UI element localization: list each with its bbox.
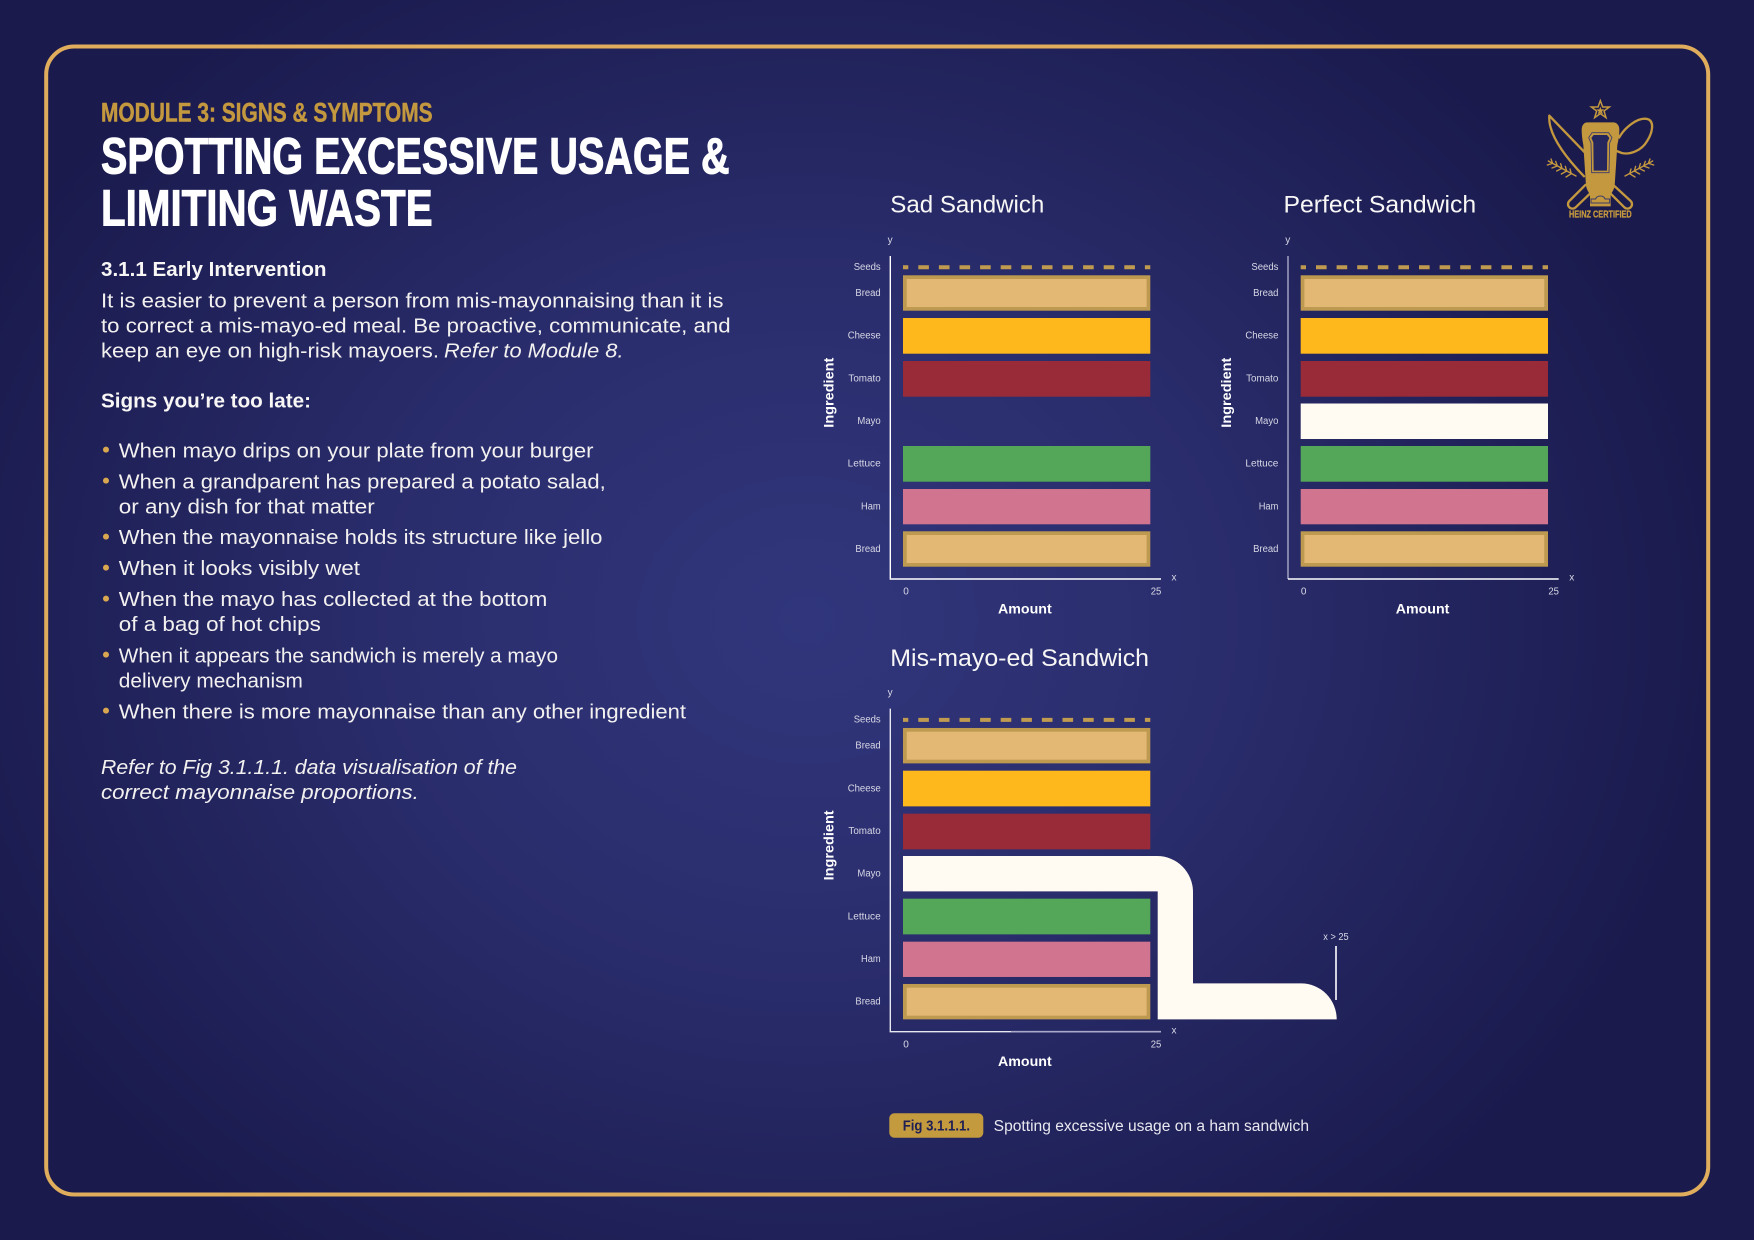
bullet list of signs: of a bag of hot chips <box>119 614 321 636</box>
axis annotations: 0 <box>1301 587 1307 598</box>
ingredient labels: Cheese <box>848 331 881 342</box>
axis annotations <box>1285 235 1574 598</box>
bullet list of signs: When the mayonnaise holds its structure like jello <box>119 527 602 549</box>
callout: x > 25 marker <box>1323 932 1349 1000</box>
axis annotations: x <box>1569 573 1574 584</box>
bullet list of signs: delivery mechanism <box>119 670 303 692</box>
intro paragraph: to correct a mis-mayo-ed meal. Be proactive, communicate, and <box>101 315 731 337</box>
chart: Sad Sandwich <box>820 192 1176 616</box>
bar: cheese <box>1301 318 1548 354</box>
bar: lettuce <box>903 446 1150 482</box>
bar: top bread <box>905 730 1148 762</box>
ingredient labels: Cheese <box>1245 331 1279 342</box>
bar: bottom bread <box>1303 533 1546 565</box>
ingredient labels: Cheese <box>848 783 881 794</box>
main title: LIMITING WASTE <box>101 180 433 237</box>
ingredient labels: Lettuce <box>848 459 881 470</box>
bullet list of signs: When a grandparent has prepared a potato salad, <box>119 471 606 493</box>
figure reference note <box>101 757 517 804</box>
bullet list of signs: When mayo drips on your plate from your burger <box>119 440 594 462</box>
intro paragraph <box>101 290 731 362</box>
bar: tomato <box>1301 361 1548 397</box>
ingredient labels: Mayo <box>1255 416 1279 427</box>
axis annotations: y <box>888 235 893 246</box>
ingredient labels: Tomato <box>848 373 881 384</box>
main title <box>101 127 730 237</box>
ingredient labels: Seeds <box>854 262 881 273</box>
section heading: early intervention: 3.1.1 Early Intervention <box>101 259 326 281</box>
axes <box>1288 256 1559 579</box>
bullet list of signs <box>103 440 686 723</box>
chart title: Mis-mayo-ed Sandwich <box>890 645 1149 672</box>
ingredient labels: Lettuce <box>1245 459 1279 470</box>
bullet list of signs: When the mayo has collected at the bottom <box>119 589 547 611</box>
ingredient labels: Seeds <box>854 715 881 726</box>
ingredient labels: Tomato <box>848 826 881 837</box>
axis title: Amount: Amount <box>998 600 1052 616</box>
caption badge <box>889 1113 983 1138</box>
bar: seeds <box>1301 265 1548 269</box>
bar: lettuce <box>1301 446 1548 482</box>
ingredient labels: Bread <box>855 544 881 555</box>
figure caption <box>889 1113 1309 1138</box>
ingredient labels: Bread <box>1253 288 1278 299</box>
axis annotations: x <box>1172 1025 1176 1036</box>
bar: bottom bread <box>905 986 1148 1018</box>
chart title: Perfect Sandwich <box>1284 192 1476 219</box>
axis annotations: 0 <box>903 587 909 598</box>
bar: top bread <box>905 277 1148 309</box>
ingredient labels: Bread <box>855 288 881 299</box>
bar: top bread <box>1303 277 1546 309</box>
ingredient labels: Bread <box>855 997 881 1008</box>
caption text: Spotting excessive usage on a ham sandwich <box>994 1118 1309 1135</box>
bar: cheese <box>903 318 1150 354</box>
axis annotations: 25 <box>1548 587 1559 598</box>
bullet list of signs: When it looks visibly wet <box>119 558 360 580</box>
main title: SPOTTING EXCESSIVE USAGE & <box>101 127 730 184</box>
ingredient labels <box>1245 262 1279 555</box>
ingredient labels: Tomato <box>1246 373 1279 384</box>
intro paragraph: It is easier to prevent a person from mis-mayonnaising than it is <box>101 290 724 312</box>
ingredient labels <box>848 262 881 555</box>
axis title: Ingredient: Ingredient <box>1218 357 1234 428</box>
ingredient labels <box>848 715 881 1008</box>
bar: lettuce <box>903 899 1150 934</box>
axis annotations: 25 <box>1151 587 1162 598</box>
subheading: signs you're too late: Signs you’re too late: <box>101 390 311 412</box>
bar: overflowing mayo <box>903 856 1337 1019</box>
bar: tomato <box>903 814 1150 849</box>
bar: tomato <box>903 361 1150 397</box>
axes <box>890 709 1161 1032</box>
chart title: Sad Sandwich <box>890 192 1044 219</box>
bar: mayo <box>1301 404 1548 439</box>
ingredient labels: Bread <box>1253 544 1278 555</box>
chart: Perfect Sandwich <box>1218 192 1574 616</box>
axis annotations: x <box>1172 573 1176 584</box>
ingredient labels: Ham <box>1259 501 1278 512</box>
axis annotations <box>888 688 1176 1050</box>
intro paragraph: keep an eye on high-risk mayoers. <box>101 340 439 362</box>
ingredient labels: Ham <box>861 501 881 512</box>
chart: Mis-mayo-ed Sandwich <box>820 645 1349 1069</box>
axis title: Ingredient: Ingredient <box>820 810 836 880</box>
axis title: Amount: Amount <box>1396 600 1450 616</box>
ingredient labels: Lettuce <box>848 911 881 922</box>
ingredient labels: Seeds <box>1251 262 1278 273</box>
bullet list of signs: When there is more mayonnaise than any other ingredient <box>119 701 686 723</box>
ingredient labels: Mayo <box>857 416 881 427</box>
axis annotations: y <box>1285 235 1290 246</box>
ingredient labels: Mayo <box>857 869 881 880</box>
bar: seeds <box>903 265 1150 269</box>
axis annotations <box>888 235 1176 598</box>
axis title: Ingredient: Ingredient <box>820 357 836 428</box>
axis annotations: y <box>888 688 893 699</box>
bar: ham <box>903 942 1150 977</box>
bar: cheese <box>903 771 1150 806</box>
axis annotations: 0 <box>903 1039 909 1050</box>
ingredient labels: Bread <box>855 741 881 752</box>
bar: ham <box>903 489 1150 524</box>
axis annotations: 25 <box>1151 1039 1162 1050</box>
bar: bottom bread <box>905 533 1148 565</box>
icon: Heinz certified badge: HEINZ CERTIFIED <box>1569 209 1632 221</box>
icon: Heinz certified badge <box>1547 101 1654 221</box>
bar: ham <box>1301 489 1548 524</box>
ingredient labels: Ham <box>861 954 881 965</box>
figure reference note: Refer to Fig 3.1.1.1. data visualisation of the <box>101 757 517 779</box>
intro paragraph: Refer to Module 8. <box>444 340 624 362</box>
callout: x > 25 marker: x > 25 <box>1323 932 1349 943</box>
caption badge: Fig 3.1.1.1. <box>903 1118 970 1135</box>
axis title: Amount: Amount <box>998 1053 1052 1069</box>
axes <box>890 256 1161 579</box>
bar: seeds <box>903 718 1150 722</box>
module eyebrow heading: MODULE 3: SIGNS & SYMPTOMS <box>101 98 433 128</box>
figure reference note: correct mayonnaise proportions. <box>101 782 419 804</box>
bullet list of signs: or any dish for that matter <box>119 496 375 518</box>
bullet list of signs: When it appears the sandwich is merely a mayo <box>119 645 558 667</box>
